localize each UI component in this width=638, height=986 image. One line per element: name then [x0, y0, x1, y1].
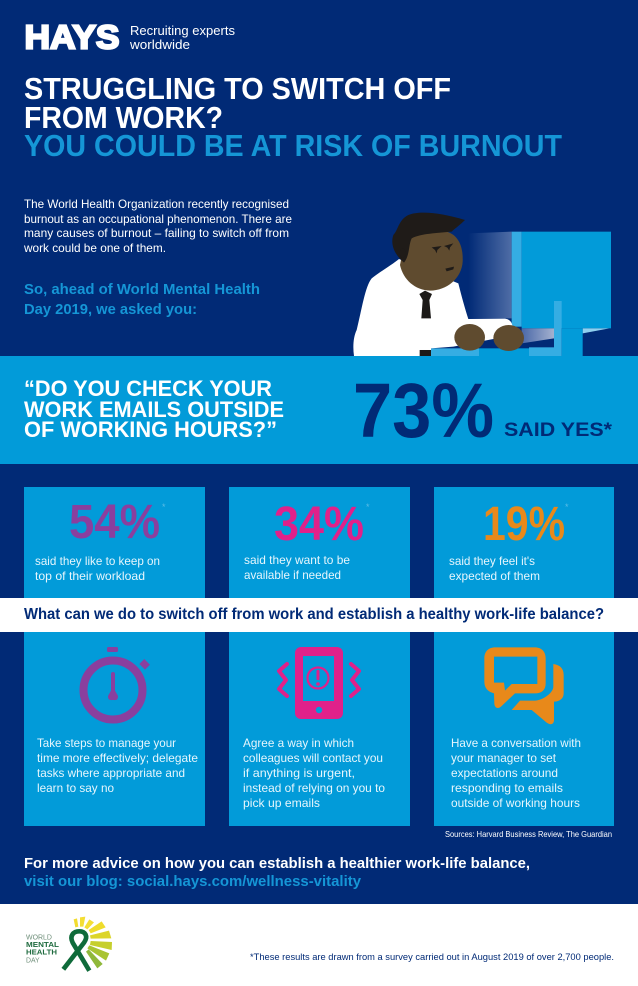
subheading: asked you: Day 2019, we asked you: — [24, 301, 197, 318]
panel: 34% stat: said they want to be — [244, 553, 350, 567]
logo: Hays: worldwide — [129, 37, 190, 52]
text: manage time: tasks where appropriate and — [37, 766, 185, 780]
title: YOU COULD BE AT RISK OF BURNOUT — [24, 128, 562, 163]
panel: 19% stat: expected of them — [449, 569, 540, 583]
title — [24, 71, 562, 163]
logo: World Mental Health Day: MENTAL — [26, 942, 60, 949]
logo: Hays: Recruiting experts — [130, 23, 235, 38]
logo: World Mental Health Day: HEALTH — [26, 950, 57, 957]
text: manage time: learn to say no — [37, 781, 114, 795]
icon: speech bubbles — [484, 647, 564, 724]
intro text: The World Health Organization recently recognised — [24, 197, 289, 211]
text: agree contact: Agree a way in which — [243, 736, 354, 750]
question text: “DO YOU CHECK YOUR — [24, 376, 272, 401]
intro text — [23, 197, 292, 255]
text: agree contact: if anything is urgent, — [243, 766, 355, 780]
subheading: asked you: So, ahead of World Mental Health — [24, 281, 260, 298]
text: agree contact: pick up emails — [243, 796, 320, 810]
panel: 34% stat: available if needed — [244, 568, 341, 582]
panel: 19% stat: * — [565, 502, 569, 512]
banner: question: What can we do to switch off from work and establish a healthy work-life balance? — [24, 606, 604, 623]
text: conversation: responding to emails — [451, 781, 563, 795]
text: manage time — [37, 736, 198, 795]
logo: World Mental Health Day: DAY — [26, 957, 40, 964]
sources: Sources: Harvard Business Review, The Guardian — [445, 829, 612, 839]
text: conversation: outside of working hours — [451, 796, 580, 810]
intro text: many causes of burnout – failing to switch off from — [24, 226, 289, 240]
logo: World Mental Health Day — [26, 917, 112, 971]
text: conversation — [451, 736, 581, 810]
panel: 54% stat: * — [162, 502, 166, 512]
text: agree contact: colleagues will contact you — [243, 751, 383, 765]
text: manage time: Take steps to manage your — [37, 736, 176, 750]
footer: *These results are drawn from a survey carried out in August 2019 of over 2,700 people. — [250, 952, 614, 963]
question text: OF WORKING HOURS?” — [24, 417, 277, 442]
text: conversation: expectations around — [451, 766, 558, 780]
call to action: visit our blog: social.hays.com/wellness-vitality — [24, 873, 362, 890]
panel: 34% stat — [229, 487, 410, 826]
logo: Hays — [24, 18, 235, 56]
question text — [24, 376, 284, 442]
stat: 73% said yes — [353, 368, 613, 454]
panel: 34% stat: 34% — [274, 498, 364, 551]
text: agree contact — [243, 736, 385, 810]
call to action: For more advice on how you can establish a healthier work-life balance, — [24, 855, 530, 872]
subheading: asked you — [24, 281, 260, 318]
call to action — [24, 855, 530, 890]
stat: 73% said yes: SAID YES* — [504, 420, 613, 441]
footer — [0, 904, 638, 986]
text: agree contact: instead of relying on you to — [243, 781, 385, 795]
logo: Hays: HAYS — [24, 18, 120, 56]
panel: 19% stat: said they feel it's — [449, 554, 535, 568]
panel: 54% stat: said they like to keep on — [35, 554, 160, 568]
panel: 34% stat: * — [366, 502, 370, 512]
icon: vibrating phone — [279, 647, 359, 719]
intro text: burnout as an occupational phenomenon. There are — [24, 212, 292, 226]
title: STRUGGLING TO SWITCH OFF — [24, 71, 451, 106]
question band — [0, 356, 638, 464]
intro text: work could be one of them. — [23, 241, 166, 255]
panel: 19% stat: 19% — [483, 498, 565, 551]
title: FROM WORK? — [24, 100, 223, 135]
logo: World Mental Health Day: WORLD — [26, 934, 52, 941]
illustration: man at computer — [353, 213, 611, 356]
panel: 54% stat: top of their workload — [35, 569, 145, 583]
icon: stopwatch — [84, 647, 150, 720]
stat: 73% said yes: 73% — [353, 368, 494, 454]
panel: 54% stat — [24, 487, 205, 826]
text: conversation: Have a conversation with — [451, 736, 581, 750]
text: conversation: your manager to set — [451, 751, 557, 765]
panel: 54% stat: 54% — [69, 496, 160, 549]
question text: WORK EMAILS OUTSIDE — [24, 397, 284, 422]
panel: 19% stat — [434, 487, 614, 826]
banner: question — [0, 598, 638, 632]
text: manage time: time more effectively; delegate — [37, 751, 198, 765]
